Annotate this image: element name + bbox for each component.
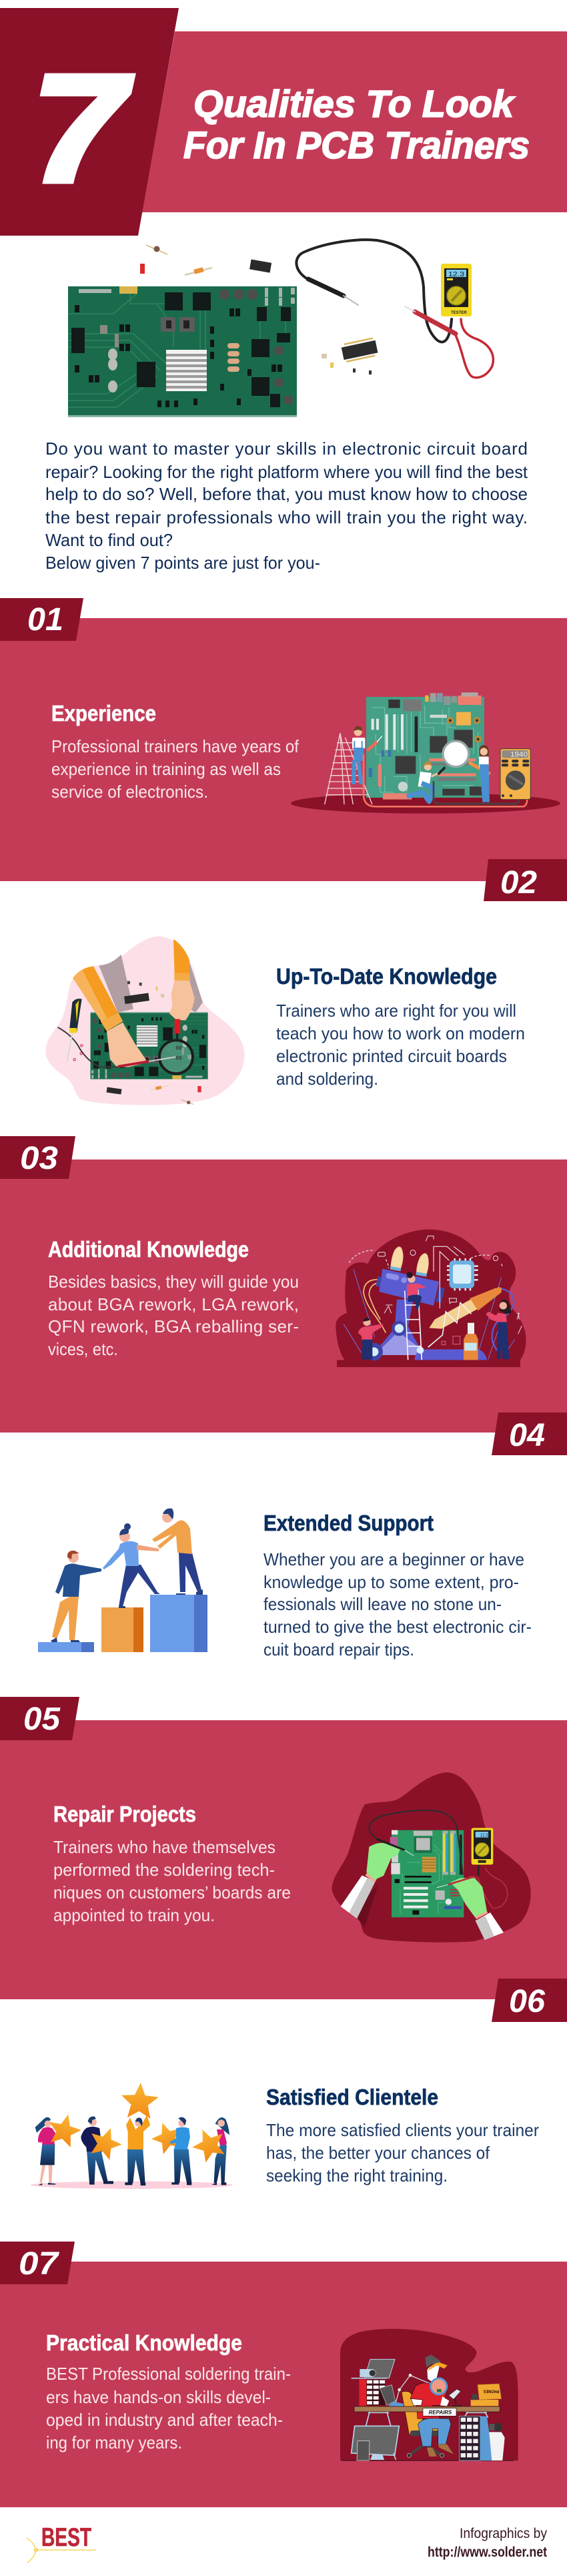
- illustration: lab equipment and people: [336, 1230, 526, 1367]
- star 2: [45, 2110, 84, 2149]
- small white icons: [378, 1236, 522, 1334]
- credit text: http://www.solder.net: [428, 2545, 547, 2560]
- panel background: [0, 2262, 567, 2507]
- woman on middle step: [103, 1523, 160, 1608]
- laptop and shelf: [352, 2359, 395, 2378]
- intro paragraph: Below given 7 points are just for you-: [45, 553, 320, 573]
- person 3: [125, 2115, 150, 2185]
- number tag 01: [0, 598, 83, 641]
- person 4: [170, 2117, 191, 2185]
- number tag 04: 04: [509, 1418, 545, 1453]
- female technician: [479, 745, 490, 802]
- loose components: [140, 245, 378, 374]
- motherboard: [390, 1830, 464, 1917]
- man on lowest step: [51, 1551, 101, 1642]
- illustration: people helping each other up steps: [38, 1509, 207, 1652]
- heading: Satisfied Clientele: [266, 2085, 438, 2109]
- body text: vices, etc.: [48, 1339, 118, 1359]
- body text: fessionals will leave no stone un-: [263, 1594, 502, 1614]
- number tag 06: 06: [509, 1984, 545, 2019]
- credit text: [428, 2526, 547, 2560]
- intro paragraph: Do you want to master your skills in electronic circuit board: [45, 439, 528, 459]
- technician: [410, 2355, 462, 2457]
- panel 02: Up-To-Date Knowledge: [45, 936, 525, 1105]
- right arm: [169, 939, 195, 1020]
- desk legs: [366, 2412, 488, 2426]
- body text: teach you how to work on modern: [276, 1023, 525, 1043]
- black probe and cable: [296, 240, 452, 342]
- panel background: [0, 618, 567, 881]
- body text: experience in training as well as: [51, 759, 281, 779]
- body text: [276, 1001, 525, 1089]
- illustration: hands soldering on a circuit board: [45, 936, 245, 1105]
- credit text: Infographics by: [460, 2526, 547, 2541]
- body text: ers have hands-on skills devel-: [46, 2387, 271, 2407]
- illustration: gloved hands testing a motherboard: [332, 1772, 531, 1943]
- chair: [402, 2391, 440, 2434]
- steps: [38, 1595, 207, 1652]
- panel background: [0, 1160, 567, 1433]
- ladder: [405, 1290, 422, 1360]
- star 4: [147, 2117, 187, 2156]
- soldering iron and cable: [58, 1027, 175, 1067]
- body text: knowledge up to some extent, pro-: [263, 1572, 519, 1592]
- body text: performed the soldering tech-: [53, 1860, 275, 1880]
- body text: service of electronics.: [51, 782, 208, 802]
- woman right: [486, 1300, 512, 1359]
- kneeling technician: [407, 762, 445, 802]
- center star: [120, 2082, 159, 2119]
- body text: [46, 2364, 291, 2453]
- man on top step: [152, 1509, 203, 1595]
- bottle: [464, 1323, 478, 1360]
- number tag 03: [0, 1136, 75, 1179]
- intro paragraph: help to do so? Well, before that, you must know how to choose: [45, 484, 528, 504]
- intro paragraph: [45, 439, 528, 573]
- title: Qualities To Look: [193, 83, 516, 125]
- body text: BEST Professional soldering train-: [46, 2364, 291, 2384]
- multimeter: 12.3: [448, 271, 465, 278]
- number tag 03: 03: [20, 1141, 58, 1176]
- title: For In PCB Trainers: [183, 124, 530, 167]
- footer: [27, 2523, 547, 2563]
- number tag 04: [492, 1412, 567, 1455]
- person 2: [81, 2116, 113, 2185]
- body text: ing for many years.: [46, 2432, 182, 2453]
- logo: BEST: [27, 2523, 96, 2563]
- phones box: [471, 2384, 502, 2406]
- body text: The more satisfied clients your trainer: [266, 2120, 539, 2140]
- number tag 02: [484, 859, 567, 901]
- microscope body: [379, 1269, 439, 1306]
- body text: electronic printed circuit boards: [276, 1046, 507, 1066]
- logo: BEST: BEST: [41, 2523, 91, 2552]
- body text: seeking the right training.: [266, 2165, 448, 2185]
- multimeter: [500, 749, 530, 800]
- panel background: [0, 1720, 567, 1999]
- number tag 07: 07: [19, 2246, 60, 2282]
- left arm: [73, 966, 147, 1067]
- bin and camera: [489, 2423, 505, 2461]
- body text: Whether you are a beginner or have: [263, 1549, 524, 1569]
- multimeter: [472, 1828, 493, 1864]
- number tag 05: [0, 1697, 79, 1740]
- person 5: [211, 2117, 229, 2185]
- desk sign: REPAIRS: [429, 2410, 452, 2416]
- title band: [142, 31, 567, 212]
- right drawer cabinet: [459, 2416, 493, 2461]
- body text: Trainers who have themselves: [53, 1837, 275, 1857]
- body text: [48, 1272, 299, 1359]
- heading: Practical Knowledge: [46, 2330, 242, 2355]
- body text: QFN rework, BGA reballing ser-: [48, 1316, 299, 1336]
- body text: Besides basics, they will guide you: [48, 1272, 299, 1292]
- heading: Experience: [51, 701, 156, 726]
- multimeter: [441, 264, 472, 316]
- side lines: [344, 1270, 515, 1360]
- body text: and soldering.: [276, 1069, 378, 1089]
- number tag 05: 05: [23, 1702, 61, 1737]
- body text: about BGA rework, LGA rework,: [48, 1294, 299, 1314]
- left gloved hand: [341, 1839, 414, 1918]
- intro paragraph: Want to find out?: [45, 530, 173, 550]
- number tag 07: [0, 2242, 75, 2284]
- panel 04: Extended Support: [38, 1509, 532, 1659]
- multimeter: 1940: [510, 751, 528, 759]
- body text: appointed to train you.: [53, 1905, 215, 1925]
- illustration: repair technician at desk: [340, 2329, 518, 2461]
- pipette: [429, 1287, 502, 1329]
- red probe and cable: [405, 306, 493, 378]
- heading: Up-To-Date Knowledge: [276, 964, 497, 989]
- man left: [358, 1318, 384, 1360]
- panel 06: Satisfied Clientele: [31, 2082, 539, 2189]
- monitor: [352, 2426, 399, 2461]
- desk sign: [423, 2408, 456, 2416]
- number tag 02: 02: [500, 865, 537, 900]
- left technician: [352, 726, 382, 784]
- multimeter: 12.3: [480, 1832, 488, 1838]
- header banner: [0, 8, 567, 236]
- person 1: [35, 2117, 59, 2185]
- body text: oped in industry and after teach-: [46, 2410, 283, 2430]
- body text: cuit board repair tips.: [263, 1639, 414, 1659]
- intro paragraph: repair? Looking for the right platform where you will find the best: [45, 462, 528, 482]
- lamp: [396, 2375, 432, 2402]
- circuit board: [68, 286, 297, 417]
- big number 7: 7: [32, 44, 132, 214]
- heading: Repair Projects: [53, 1802, 196, 1826]
- test cables: [369, 1810, 508, 1908]
- body text: niques on customers’ boards are: [53, 1882, 291, 1902]
- body text: [263, 1549, 532, 1659]
- dark number block: [0, 8, 179, 236]
- body text: [53, 1837, 291, 1925]
- body text: has, the better your chances of: [266, 2143, 490, 2163]
- body text: [51, 736, 300, 802]
- girl on ladder: [407, 1272, 426, 1310]
- star 5: [187, 2123, 230, 2165]
- intro paragraph: the best repair professionals who will train you the right way.: [45, 507, 528, 527]
- stand: [372, 1300, 424, 1355]
- title: [183, 83, 530, 167]
- body text: [266, 2120, 539, 2185]
- chip: [447, 1258, 478, 1290]
- body text: Trainers who are right for you will: [276, 1001, 516, 1021]
- magnifying glass: [159, 1019, 193, 1073]
- body text: Professional trainers have years of: [51, 736, 300, 756]
- illustration: technicians on motherboard: [291, 692, 560, 814]
- hero illustration: circuit board and multimeter: [68, 240, 493, 417]
- bulbs: [391, 1247, 428, 1274]
- panel 01: Experience: [0, 598, 567, 881]
- heading: Extended Support: [263, 1511, 434, 1535]
- desk: [354, 2406, 500, 2412]
- panel 05: Repair Projects: [0, 1697, 567, 1999]
- number tag 01: 01: [27, 602, 63, 637]
- panel 03: Additional Knowledge: [0, 1136, 567, 1433]
- small parts: [73, 981, 201, 1104]
- heading: Additional Knowledge: [48, 1237, 249, 1262]
- red drawer cabinet: [359, 2379, 386, 2406]
- panel 07: Practical Knowledge: [0, 2242, 567, 2507]
- circuit lines: [349, 1246, 503, 1308]
- illustration: people holding stars: [31, 2082, 233, 2189]
- phones box: PHONES: [484, 2388, 499, 2392]
- star 3: [85, 2123, 126, 2162]
- multimeter: TESTER: [451, 311, 467, 315]
- body text: turned to give the best electronic cir-: [263, 1617, 532, 1637]
- screwdriver: [67, 999, 82, 1061]
- number tag 06: [492, 1979, 567, 2022]
- right gloved hand: [437, 1876, 504, 1940]
